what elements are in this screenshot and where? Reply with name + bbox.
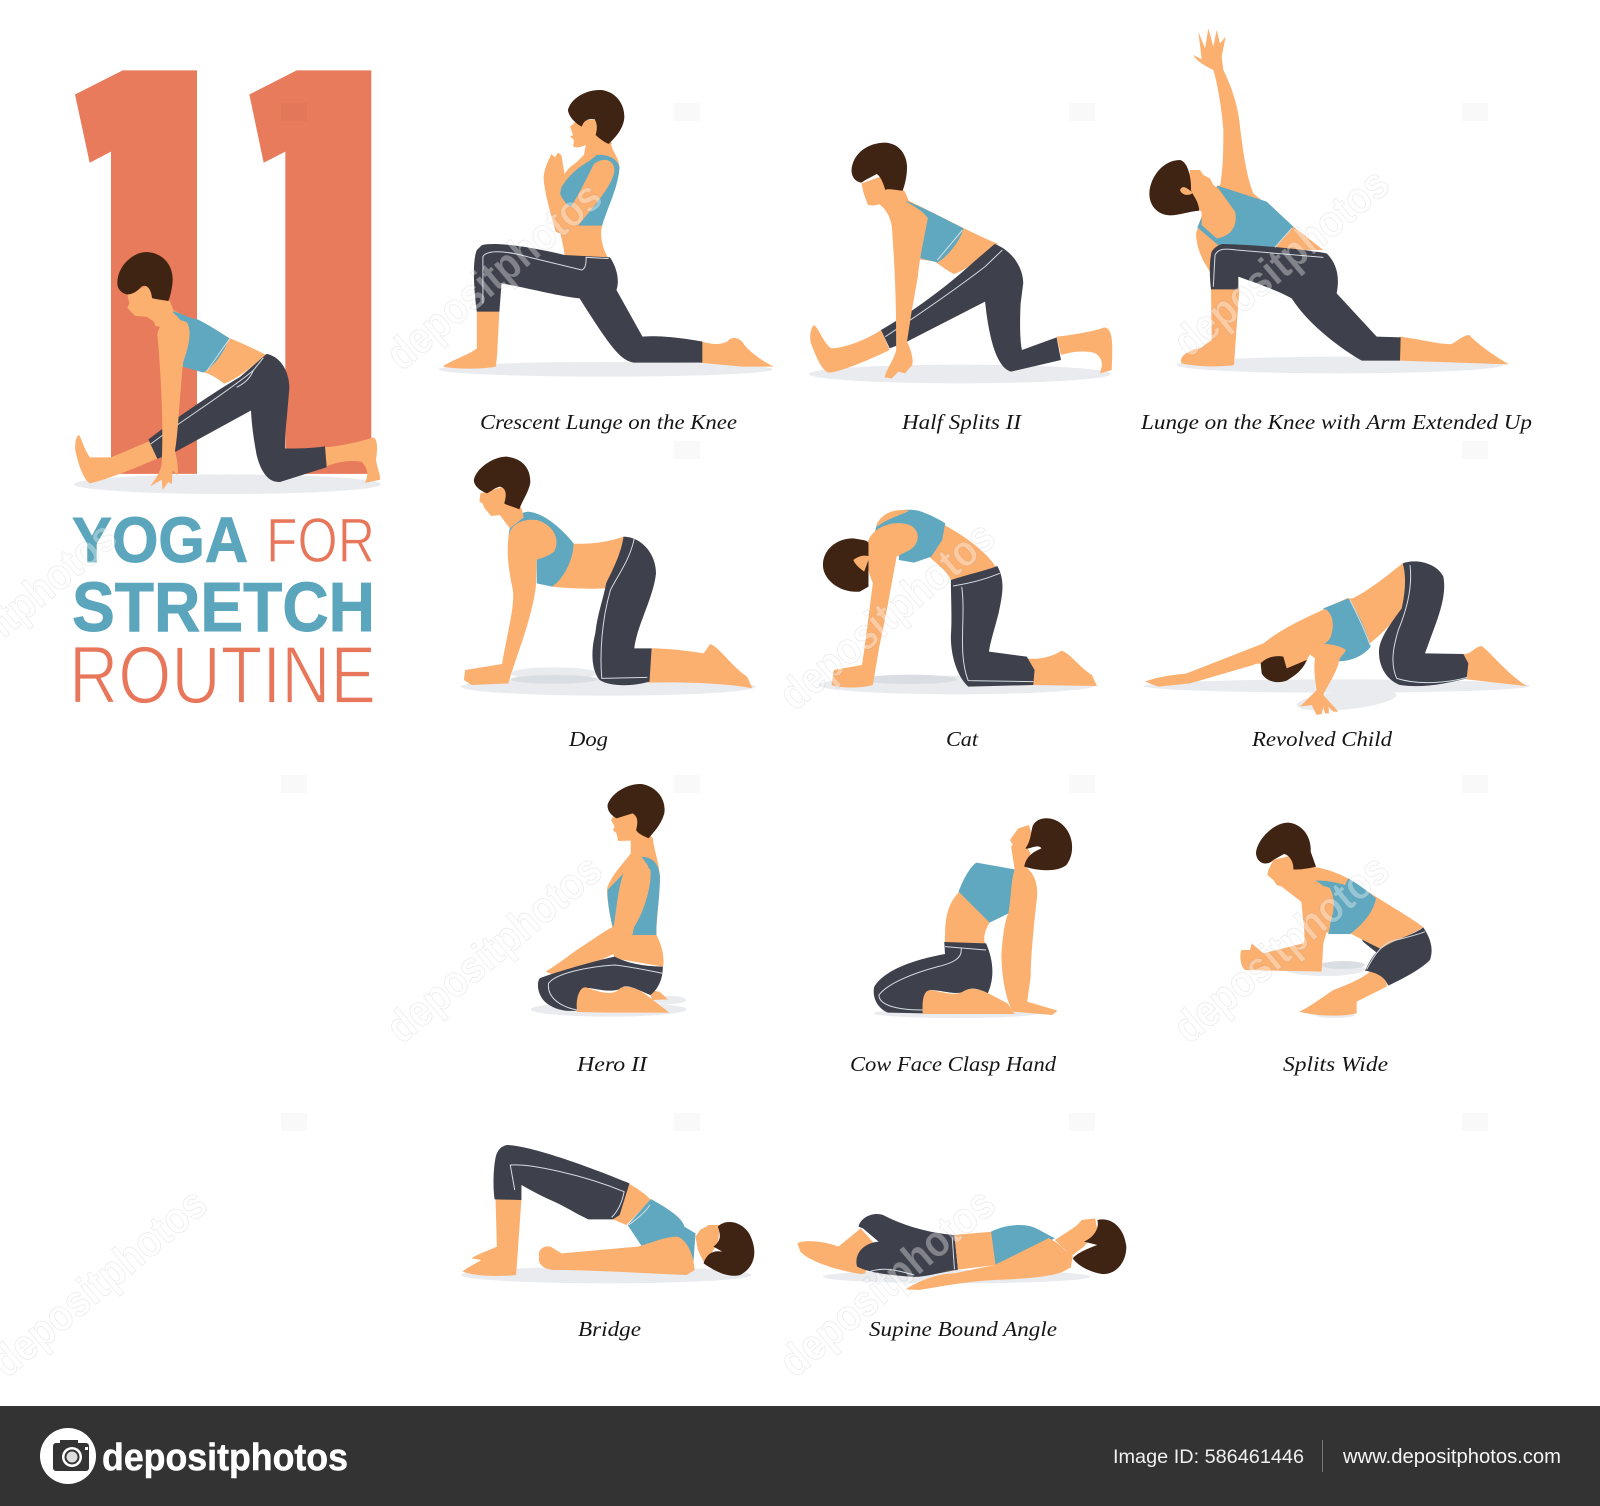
- pose: cat: [819, 510, 1097, 694]
- top: [1315, 878, 1376, 934]
- foot: [1463, 646, 1527, 686]
- seams: [885, 230, 1002, 337]
- torso: [1196, 185, 1323, 277]
- belly: [929, 525, 996, 580]
- pants: [474, 244, 702, 363]
- calf: [577, 987, 669, 1013]
- pants: [148, 354, 327, 482]
- head: [568, 90, 624, 147]
- heading line 1: FOR: [266, 506, 375, 576]
- watermark overlay: depositphotos: [1164, 845, 1398, 1053]
- pose: lunge on the knee with arm extended up: [1149, 28, 1509, 373]
- head: [117, 252, 173, 326]
- belly: [941, 1232, 996, 1272]
- back foot: [699, 338, 774, 367]
- footer bar: [0, 1406, 1600, 1506]
- heading line 1: [72, 504, 375, 576]
- back foot: [1057, 327, 1112, 373]
- top: [959, 863, 1015, 923]
- pose: supine bound angle: [797, 1214, 1126, 1290]
- seams: [1367, 932, 1425, 969]
- arm: [464, 520, 557, 685]
- seams: [548, 965, 663, 1010]
- pose: bridge: [461, 1145, 754, 1283]
- top: [873, 510, 945, 563]
- label: Supine Bound Angle: [869, 1317, 1057, 1341]
- waist: [945, 892, 991, 945]
- shadow: [823, 1270, 1091, 1283]
- head: [823, 538, 870, 592]
- torso: [607, 838, 664, 967]
- pants: [494, 1145, 629, 1219]
- logo icon: camera: [40, 1428, 96, 1484]
- hero panel: big number 11 with figure: [74, 70, 381, 494]
- logo wordmark: depositphotos: [102, 1437, 348, 1479]
- label: Revolved Child: [1251, 727, 1393, 751]
- torso: [885, 190, 998, 274]
- head: [607, 784, 665, 841]
- shadow: [1143, 679, 1530, 715]
- watermark overlay: depositphotos: [1164, 159, 1398, 367]
- pose: cow face clasp hand: [874, 818, 1072, 1018]
- torso: [559, 143, 620, 257]
- watermark overlay: depositphotos: [770, 512, 1004, 720]
- shadow: [531, 996, 686, 1017]
- pose: dog: [461, 457, 756, 696]
- seam lines: [151, 338, 263, 444]
- label: Dog: [568, 727, 608, 751]
- foot and leg: [797, 1228, 874, 1274]
- top: [607, 857, 660, 935]
- seams: [510, 1165, 650, 1225]
- arm: [1240, 886, 1334, 972]
- arm: [1001, 845, 1057, 1015]
- top: [1197, 186, 1293, 248]
- seams: [953, 573, 1033, 682]
- pose: revolved child: [1143, 561, 1530, 715]
- extended arm: [1145, 609, 1333, 687]
- big number 11: [75, 70, 371, 474]
- head: [1010, 818, 1072, 870]
- label: Cow Face Clasp Hand: [850, 1052, 1057, 1076]
- top: [171, 311, 229, 373]
- top: [905, 201, 963, 262]
- pose: half splits ii: [809, 143, 1112, 383]
- shadow: [819, 675, 1096, 694]
- arm: [832, 523, 918, 687]
- supporting arm: [1300, 644, 1346, 715]
- seams: [1213, 228, 1323, 287]
- pants: [881, 244, 1061, 372]
- foot: [1027, 651, 1097, 686]
- arm: [544, 153, 614, 233]
- arm: [539, 1237, 695, 1275]
- pants: [592, 537, 656, 685]
- back skin: [1325, 563, 1405, 643]
- pants: [874, 942, 992, 1013]
- pants: [951, 566, 1035, 687]
- shadow: [461, 667, 756, 696]
- seams: [483, 252, 609, 303]
- pants: [1210, 244, 1401, 361]
- seams: [870, 1237, 954, 1275]
- raised arm: [1193, 28, 1263, 202]
- heading line 3: ROUTINE: [69, 630, 376, 721]
- head: [1149, 160, 1218, 215]
- title: yoga for stretch routine: [69, 504, 376, 721]
- belly: [552, 537, 623, 589]
- shadow: [874, 1009, 1038, 1018]
- head: [852, 143, 907, 206]
- top: [991, 1225, 1055, 1265]
- leg: [1299, 972, 1387, 1016]
- pants: [856, 1214, 958, 1277]
- label: Crescent Lunge on the Knee: [480, 410, 737, 434]
- shadow: [1285, 961, 1365, 1018]
- front shin: [443, 310, 499, 369]
- top: [509, 512, 574, 587]
- pants: [1379, 561, 1468, 686]
- legs skin: [75, 435, 380, 483]
- shadow: [809, 365, 1111, 383]
- pants: [538, 957, 663, 1011]
- head: [1055, 1218, 1126, 1274]
- head: [1256, 823, 1316, 903]
- shoulder: [1202, 188, 1236, 238]
- shin and feet: [463, 1199, 521, 1276]
- torso: [1299, 867, 1423, 950]
- label: Bridge: [578, 1317, 641, 1341]
- watermark overlay: depositphotos: [377, 845, 611, 1053]
- pose: hero ii: [531, 784, 686, 1017]
- top: [559, 155, 620, 226]
- pose: splits wide: [1240, 823, 1432, 1018]
- back band: [1362, 939, 1382, 953]
- neck: [1011, 837, 1031, 870]
- front leg: [810, 325, 890, 373]
- seams: [1350, 565, 1467, 683]
- arm: [546, 864, 651, 976]
- image id: Image ID: 586461446: [1113, 1446, 1304, 1468]
- head: [1261, 652, 1308, 682]
- shadow: [439, 362, 773, 377]
- shadow: [461, 1267, 751, 1283]
- top: [1317, 598, 1371, 661]
- back foot: [1399, 335, 1509, 364]
- shorts: [1365, 927, 1432, 986]
- arm: [150, 320, 190, 490]
- label: Hero II: [576, 1052, 648, 1076]
- watermark overlay: depositphotos: [377, 172, 611, 380]
- head: [696, 1222, 754, 1276]
- heading line 2: STRETCH: [72, 568, 375, 646]
- shoulder: [877, 510, 910, 527]
- seams: [601, 538, 647, 678]
- label: Half Splits II: [901, 410, 1022, 434]
- label: Cat: [946, 727, 979, 751]
- arm: [884, 211, 928, 378]
- front shin and hand: [1181, 288, 1239, 366]
- torso skin: [150, 298, 266, 384]
- website url: www.depositphotos.com: [1342, 1446, 1561, 1468]
- watermark overlay: depositphotos: [770, 1179, 1004, 1387]
- shoulder: [1048, 1237, 1073, 1268]
- calf and foot: [647, 644, 752, 688]
- belly: [613, 1183, 651, 1225]
- label: Lunge on the Knee with Arm Extended Up: [1140, 410, 1532, 434]
- seams: [879, 947, 986, 1010]
- ground shadow: [74, 474, 381, 494]
- top: [628, 1199, 696, 1273]
- label: Splits Wide: [1283, 1052, 1388, 1076]
- heading line 1: YOGA: [72, 504, 248, 576]
- head: [474, 457, 530, 528]
- neck: [879, 192, 928, 227]
- pose: crescent lunge on the knee: [439, 90, 774, 377]
- back foot: [649, 990, 668, 1000]
- shadow: [1177, 357, 1503, 373]
- arm: [905, 1238, 1071, 1290]
- watermark overlay: [0, 103, 1488, 1387]
- calf: [923, 989, 1015, 1014]
